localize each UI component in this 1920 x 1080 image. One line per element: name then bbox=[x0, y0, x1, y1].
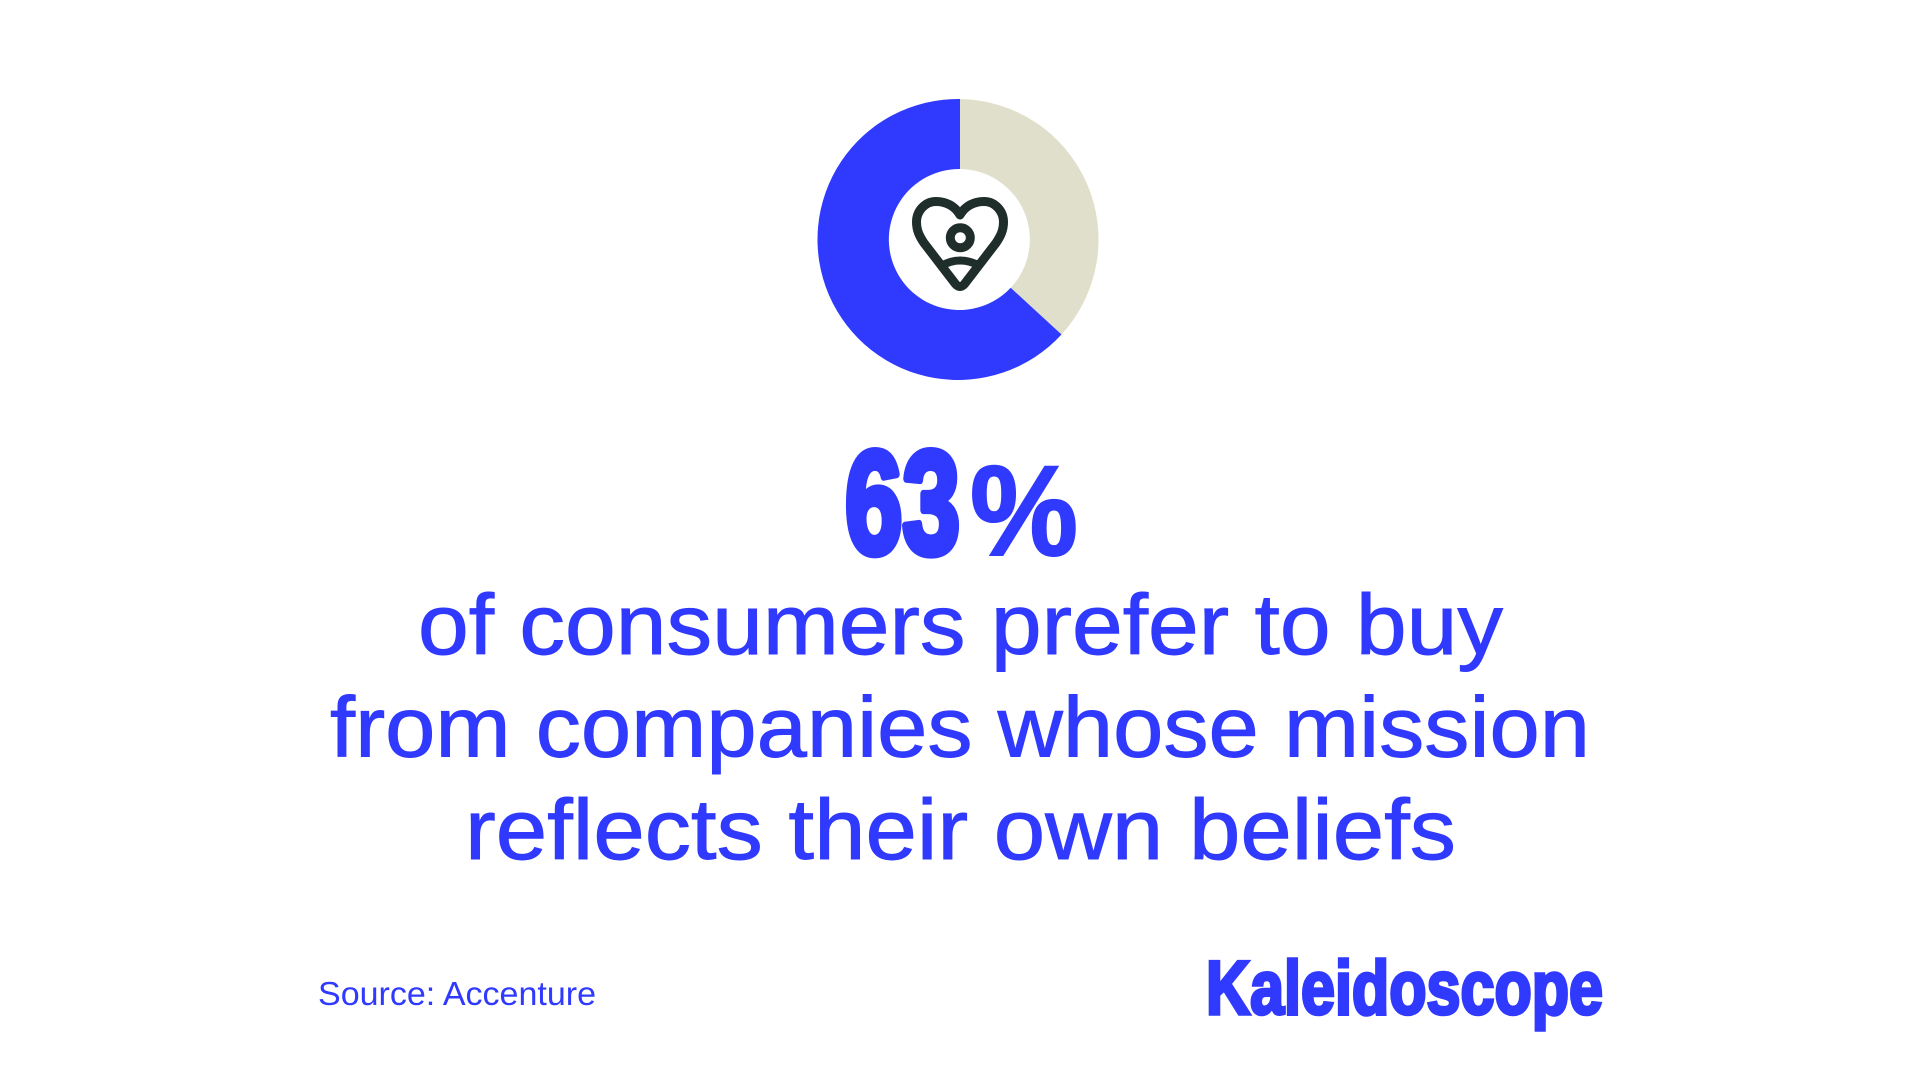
donut segment: 63% bbox=[817, 99, 1062, 380]
big statistic: 63% bbox=[845, 421, 1078, 584]
icon: heart with person bbox=[916, 202, 1004, 286]
statement text: from companies whose mission bbox=[330, 680, 1590, 776]
donut chart: 63% bbox=[817, 99, 1098, 380]
logo: Kaleidoscope: Kaleidoscope bbox=[1206, 946, 1603, 1031]
big statistic: 63%: 63 bbox=[845, 421, 960, 584]
big statistic: 63%: % bbox=[970, 440, 1078, 583]
donut segment: remaining 37% bbox=[960, 99, 1098, 334]
statement text bbox=[330, 578, 1590, 878]
source note: Source: Accenture bbox=[318, 975, 596, 1012]
statement text: reflects their own beliefs bbox=[465, 783, 1456, 878]
statement text: of consumers prefer to buy bbox=[418, 578, 1504, 673]
